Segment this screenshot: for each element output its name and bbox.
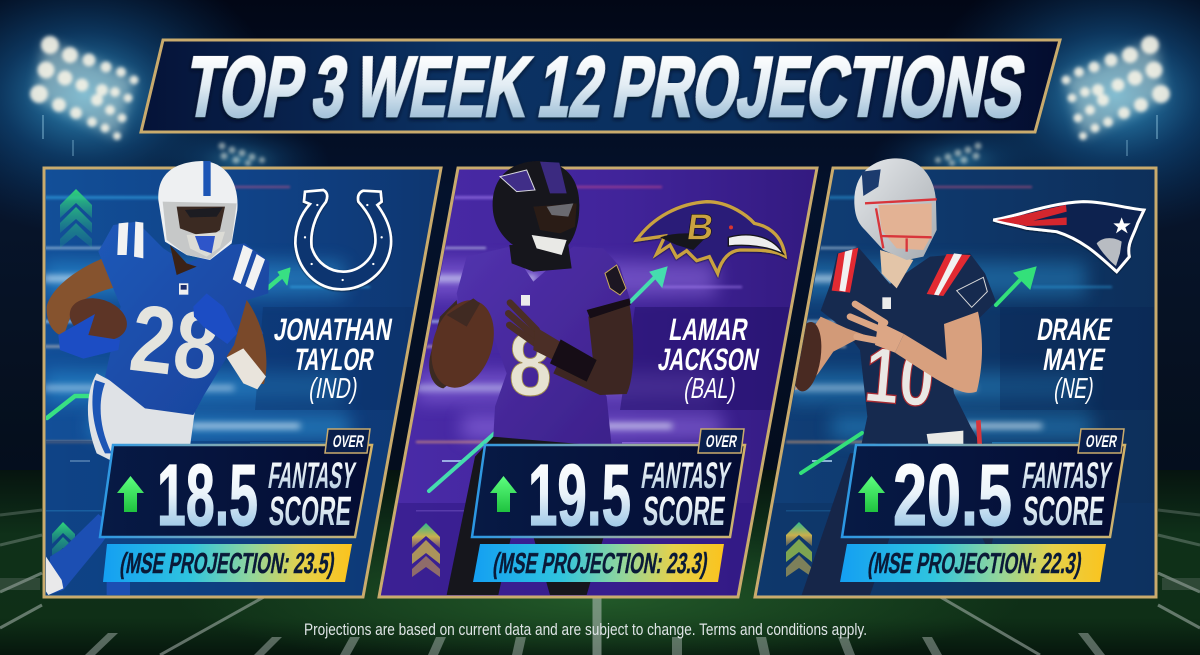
score value: 19.5 bbox=[528, 447, 631, 544]
chart arrow: rising trend bbox=[429, 267, 667, 491]
player name: Jonathan Taylor (IND) bbox=[272, 312, 395, 405]
score label bbox=[266, 454, 358, 534]
over tag bbox=[1078, 429, 1124, 453]
projection bar: MSE 22.3 bbox=[840, 544, 1106, 582]
over tag: OVER bbox=[331, 431, 366, 451]
player name: Lamar Jackson (BAL): JACKSON bbox=[656, 342, 762, 377]
jersey number: 10 bbox=[861, 330, 938, 424]
score label bbox=[639, 454, 733, 534]
projection bar: MSE 23.5 bbox=[103, 544, 352, 582]
projection bar: MSE 23.3: (MSE PROJECTION: 23.3) bbox=[491, 548, 710, 580]
panel: Jonathan Taylor bbox=[44, 161, 444, 601]
score label: SCORE bbox=[267, 488, 353, 534]
score value: 20.5 bbox=[893, 447, 1012, 544]
logo: Colts horseshoe bbox=[295, 190, 391, 289]
player name: Drake Maye (NE): (NE) bbox=[1052, 373, 1096, 405]
over tag bbox=[325, 429, 370, 453]
icon: top chevrons bbox=[60, 189, 92, 248]
score label bbox=[1020, 454, 1114, 534]
footer disclaimer: Projections are based on current data and are subject to change. Terms and conditions apply. bbox=[304, 620, 867, 639]
panel: Lamar Jackson bbox=[370, 161, 817, 603]
score label: FANTASY bbox=[639, 454, 733, 496]
player name: Drake Maye (NE) bbox=[1035, 312, 1115, 405]
title banner bbox=[141, 40, 1060, 135]
player name: Drake Maye (NE): DRAKE bbox=[1035, 312, 1115, 347]
projection bar: MSE 23.5: (MSE PROJECTION: 23.5) bbox=[118, 548, 337, 580]
player: Jonathan Taylor bbox=[45, 161, 269, 595]
score label: FANTASY bbox=[1020, 454, 1114, 496]
icon: up arrow bbox=[490, 476, 517, 512]
chart arrow: rising trend bbox=[801, 267, 1036, 473]
icon: up arrow bbox=[858, 476, 885, 512]
logo: Ravens bbox=[637, 202, 785, 273]
score label: FANTASY bbox=[266, 454, 358, 496]
player: Lamar Jackson bbox=[421, 161, 633, 595]
icon: bottom chevrons bbox=[786, 522, 812, 577]
player: Drake Maye bbox=[788, 158, 996, 595]
logo: Patriots bbox=[993, 202, 1144, 272]
score label: SCORE bbox=[1021, 488, 1106, 534]
icon: right stadium lights bbox=[1062, 36, 1170, 156]
score box: 18.5 fantasy score bbox=[100, 429, 372, 544]
over tag bbox=[698, 429, 744, 453]
score value: 18.5 bbox=[157, 447, 258, 544]
score box: 20.5 fantasy score bbox=[842, 429, 1125, 544]
score box: 19.5 fantasy score bbox=[472, 429, 745, 544]
player name: Jonathan Taylor (IND): JONATHAN bbox=[272, 312, 395, 347]
over tag: OVER bbox=[704, 431, 739, 451]
player name: Lamar Jackson (BAL): (BAL) bbox=[682, 373, 738, 405]
icon: far stadium lights bbox=[218, 142, 982, 166]
icon: up arrow bbox=[117, 476, 144, 512]
panel: Drake Maye bbox=[750, 158, 1160, 603]
player name: Lamar Jackson (BAL): LAMAR bbox=[667, 312, 751, 347]
icon: bottom chevrons bbox=[52, 522, 75, 558]
player name: Jonathan Taylor (IND): (IND) bbox=[307, 373, 360, 405]
jersey number: 8 bbox=[509, 315, 552, 415]
player name: Lamar Jackson (BAL) bbox=[656, 312, 762, 405]
player name: Drake Maye (NE): MAYE bbox=[1041, 342, 1108, 377]
icon: bottom chevrons bbox=[412, 523, 440, 577]
logo letter: B bbox=[684, 206, 717, 247]
over tag: OVER bbox=[1084, 431, 1119, 451]
icon: left stadium lights bbox=[30, 36, 138, 156]
jersey number: 28 bbox=[125, 285, 224, 401]
score label: SCORE bbox=[641, 488, 727, 534]
projection bar: MSE 23.3 bbox=[473, 544, 724, 582]
player name: Jonathan Taylor (IND): TAYLOR bbox=[292, 342, 377, 377]
chart arrow: rising trend bbox=[47, 268, 290, 418]
